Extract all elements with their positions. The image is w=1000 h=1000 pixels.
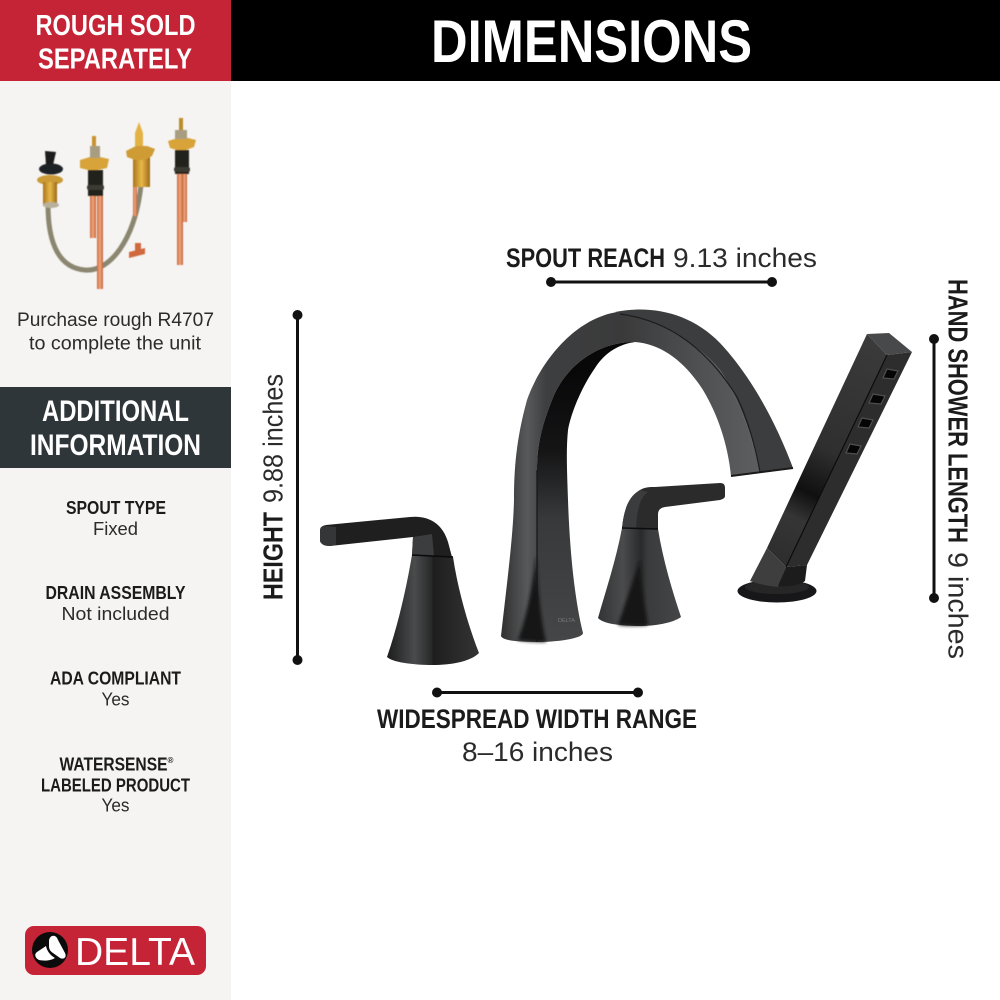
spec: ada compliant: ADA COMPLIANT [50, 668, 182, 688]
cone [598, 528, 681, 626]
banner: rough sold separately: ROUGH SOLD [36, 10, 196, 42]
spec: watersense labeled product: WATERSENSE [60, 754, 168, 774]
label: height: HEIGHT [258, 512, 288, 600]
heading: additional information: INFORMATION [30, 429, 201, 462]
arrow: height dimension line [292, 310, 302, 665]
title: dimensions: DIMENSIONS [431, 8, 752, 75]
diverter valve [37, 151, 63, 208]
arrow: hand shower dimension line [929, 334, 939, 603]
panel: sidebar background [0, 81, 231, 1000]
label: height [258, 374, 288, 600]
spec: spout type: Fixed [93, 518, 138, 539]
spec: spout type [66, 497, 166, 539]
label: spout reach: 9.13 inches [673, 243, 817, 273]
banner: rough sold separately: SEPARATELY [38, 44, 192, 76]
arrow: spout reach dimension line [546, 277, 777, 287]
label: widespread width range: WIDESPREAD WIDTH RANGE [377, 704, 697, 734]
spec: watersense labeled product [41, 754, 191, 816]
banner: rough sold separately [0, 0, 231, 81]
spray nozzles [846, 369, 898, 454]
shower top face [867, 333, 912, 355]
spec: drain assembly [46, 582, 186, 624]
text: purchase rough note: to complete the unit [29, 334, 202, 354]
spec: ada compliant: Yes [102, 688, 130, 710]
illustration: rough valve kit [37, 118, 196, 289]
hose [48, 185, 141, 270]
spec: drain assembly: DRAIN ASSEMBLY [46, 582, 186, 603]
label: spout reach: SPOUT REACH [506, 243, 665, 273]
spec: spout type: SPOUT TYPE [66, 497, 166, 518]
title: dimensions [231, 0, 1000, 81]
logo: delta [25, 926, 206, 975]
illustration: left handle [320, 517, 479, 665]
cone [387, 555, 479, 665]
lever [622, 483, 725, 529]
heading: additional information [0, 387, 231, 468]
spec: ada compliant [50, 668, 182, 710]
text: purchase rough note: Purchase rough R4707 [17, 310, 214, 331]
base shadow crease [518, 555, 546, 642]
heading: additional information: ADDITIONAL [42, 395, 189, 428]
logo: delta: DELTA [75, 931, 195, 974]
text: purchase rough note [17, 310, 214, 354]
valve two [80, 136, 109, 289]
label: height: 9.88 inches [258, 374, 288, 503]
label: spout reach [506, 243, 817, 273]
valve three [126, 122, 155, 216]
shower right face [786, 352, 912, 567]
spec: watersense labeled product: Yes [102, 794, 130, 816]
spec: watersense labeled product: LABELED PRODUCT [41, 774, 191, 796]
ribbon face: column and arch [501, 312, 760, 642]
illustration: hand shower [738, 333, 912, 602]
brand mark on base: DELTA [558, 618, 575, 624]
holder base [738, 580, 816, 602]
illustration: right handle [598, 483, 725, 626]
label: hand shower length: HAND SHOWER LENGTH [942, 279, 974, 543]
label: widespread width range: 8–16 inches [462, 737, 613, 767]
arch outer band [615, 310, 793, 472]
spec: watersense labeled product: ® [168, 756, 174, 765]
illustration: main spout [501, 310, 793, 642]
inner dark face [537, 342, 635, 642]
spec: drain assembly: Not included [62, 603, 170, 624]
shower left face [767, 334, 887, 567]
label: hand shower length: 9 inches [942, 552, 974, 659]
label: widespread width range [377, 704, 697, 767]
lever [320, 517, 452, 557]
arrow: width dimension line [432, 688, 643, 698]
valve four [168, 118, 196, 265]
tee fitting [129, 243, 145, 258]
